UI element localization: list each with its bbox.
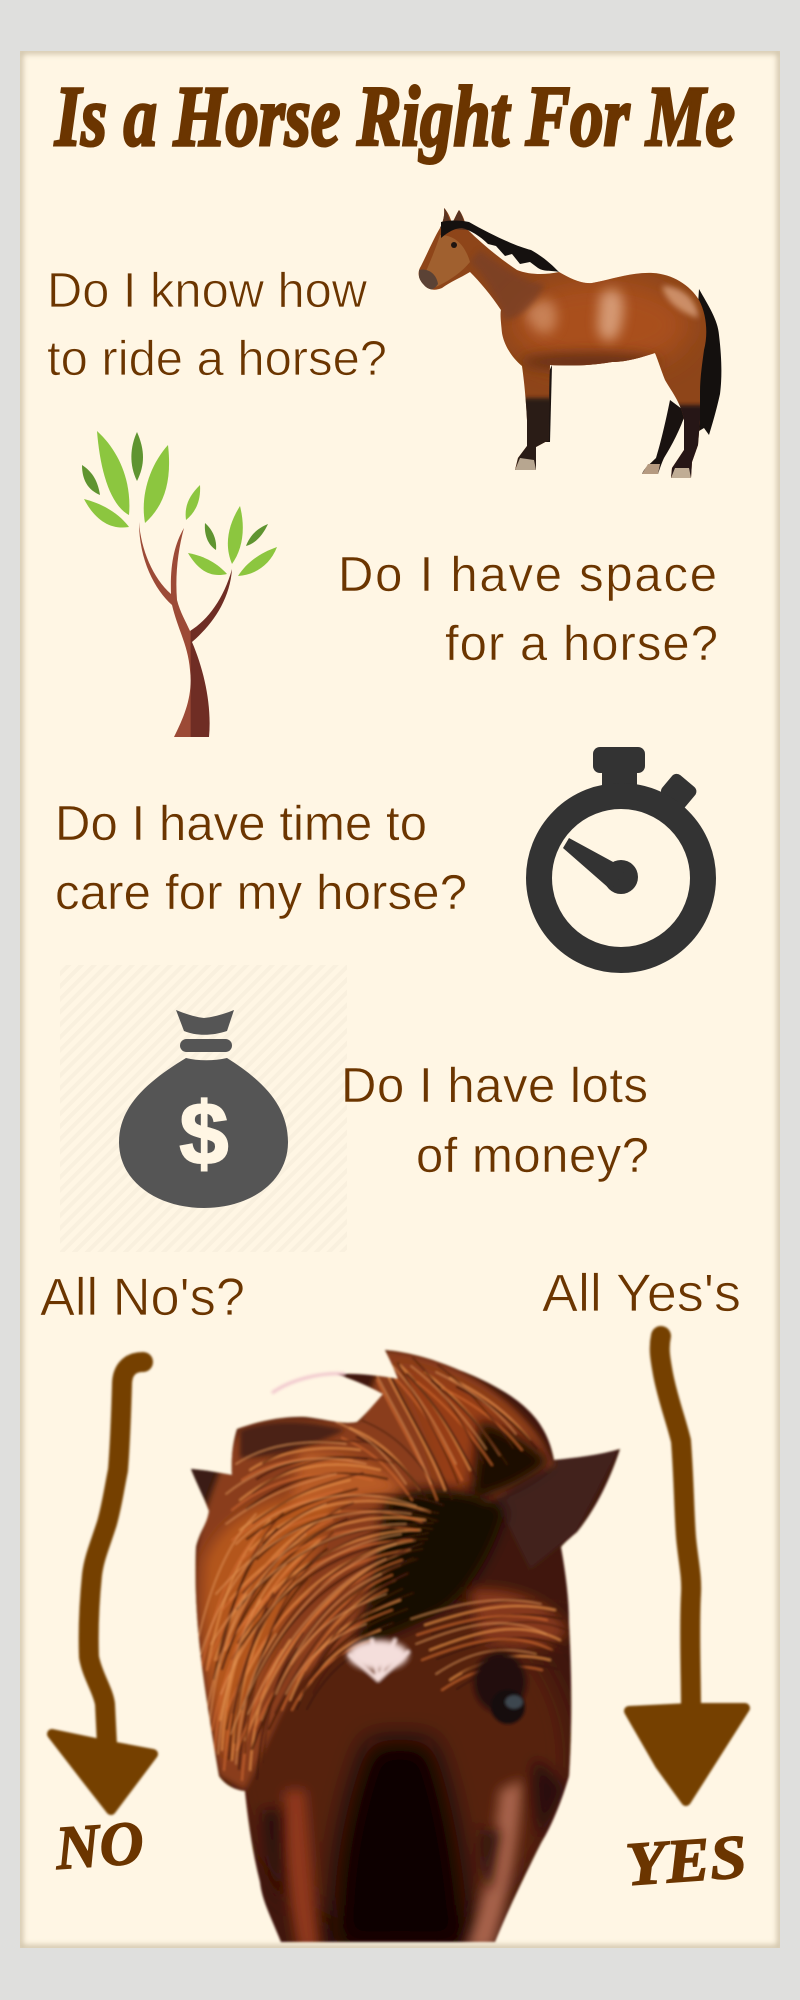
arrow: no bbox=[52, 1362, 153, 1810]
question text: time: care for my horse? bbox=[55, 866, 467, 920]
icon: tree bbox=[82, 431, 277, 737]
icon: stopwatch bbox=[539, 747, 703, 960]
panel: space question bbox=[82, 431, 718, 737]
panel: ride question bbox=[47, 205, 721, 480]
pony forelock star bbox=[348, 1640, 408, 1680]
question text: time: Do I have time to bbox=[55, 797, 427, 851]
tree trunk and branches bbox=[139, 522, 232, 737]
pony ear bbox=[490, 1449, 620, 1570]
label: all no's: All No's? bbox=[40, 1268, 245, 1327]
question text: money: of money? bbox=[416, 1129, 649, 1183]
pony hair wisp bbox=[272, 1374, 345, 1393]
verdict: yes: YES bbox=[623, 1823, 749, 1899]
tree leaves bbox=[84, 431, 277, 576]
horse coat shading bbox=[510, 280, 690, 370]
panel: time question bbox=[55, 747, 703, 960]
pony eye bbox=[474, 1652, 526, 1724]
question text: space: for a horse? bbox=[445, 617, 718, 671]
question text: money: Do I have lots bbox=[341, 1059, 648, 1113]
icon: money bag bbox=[119, 1010, 288, 1208]
panel: no path bbox=[40, 1268, 245, 1883]
question text: riding: to ride a horse? bbox=[47, 332, 387, 386]
hatched backdrop bbox=[60, 965, 347, 1252]
arrow: yes bbox=[629, 1336, 745, 1801]
photo: pony head bbox=[180, 1340, 630, 1950]
label: all yes's: All Yes's bbox=[542, 1264, 741, 1323]
panel: yes path bbox=[542, 1264, 749, 1899]
question text: riding: Do I know how bbox=[47, 264, 368, 318]
pony face bbox=[230, 1590, 570, 1950]
question text: space: Do I have space bbox=[338, 548, 717, 602]
dollar sign: $ bbox=[180, 1084, 228, 1183]
icon: standing horse bbox=[419, 205, 721, 480]
panel: money question bbox=[60, 965, 649, 1252]
pony mane bbox=[193, 1350, 573, 1790]
verdict: no: NO bbox=[52, 1809, 146, 1883]
